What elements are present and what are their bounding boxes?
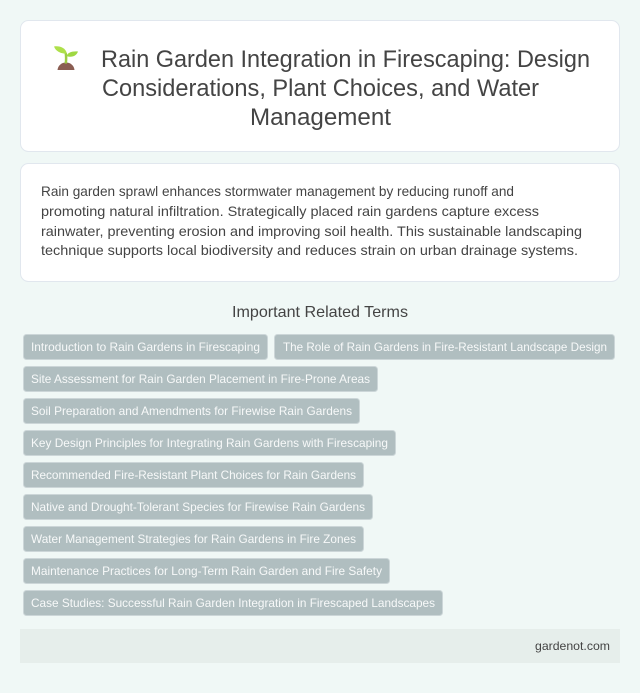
tag: Soil Preparation and Amendments for Firewise Rain Gardens xyxy=(31,404,352,418)
footer: gardenot.com xyxy=(535,639,610,653)
heading: related terms: Important Related Terms xyxy=(232,304,408,321)
tag: Recommended Fire-Resistant Plant Choices for Rain Gardens xyxy=(31,468,356,482)
panel: header xyxy=(20,20,620,152)
tag: Introduction to Rain Gardens in Firescaping xyxy=(31,340,260,354)
text block: description: rainwater, preventing erosion and improving soil health. This sustainable landscaping xyxy=(41,223,582,239)
tag xyxy=(24,430,396,456)
title xyxy=(101,46,590,131)
tags list xyxy=(24,334,614,616)
text block: description xyxy=(41,183,582,258)
tag xyxy=(24,590,442,616)
icon: seedling xyxy=(54,46,78,70)
tag xyxy=(24,494,372,520)
tag xyxy=(24,334,268,360)
text block: description: technique supports local biodiversity and reduces strain on urban drainage systems. xyxy=(41,242,578,258)
tag: Site Assessment for Rain Garden Placement in Fire-Prone Areas xyxy=(31,372,370,386)
tag: Key Design Principles for Integrating Rain Gardens with Firescaping xyxy=(31,436,388,450)
tag: Native and Drought-Tolerant Species for Firewise Rain Gardens xyxy=(31,500,365,514)
tag xyxy=(24,558,390,584)
title: Considerations, Plant Choices, and Water xyxy=(102,75,539,102)
tag: Maintenance Practices for Long-Term Rain Garden and Fire Safety xyxy=(31,564,382,578)
tag xyxy=(24,366,378,392)
tag xyxy=(24,462,364,488)
tag: Case Studies: Successful Rain Garden Integration in Firescaped Landscapes xyxy=(31,596,435,610)
text block: description: Rain garden sprawl enhances stormwater management by reducing runoff and xyxy=(41,183,514,199)
title: Management xyxy=(250,104,391,131)
tag xyxy=(24,526,364,552)
text block: description: promoting natural infiltration. Strategically placed rain gardens capture excess xyxy=(41,203,539,219)
tag: The Role of Rain Gardens in Fire-Resistant Landscape Design xyxy=(283,340,607,354)
tag xyxy=(24,398,360,424)
tag xyxy=(274,334,614,360)
footer xyxy=(20,629,620,663)
panel: description xyxy=(20,164,620,282)
title: Rain Garden Integration in Firescaping: Design xyxy=(101,46,590,73)
tag: Water Management Strategies for Rain Gardens in Fire Zones xyxy=(31,532,356,546)
